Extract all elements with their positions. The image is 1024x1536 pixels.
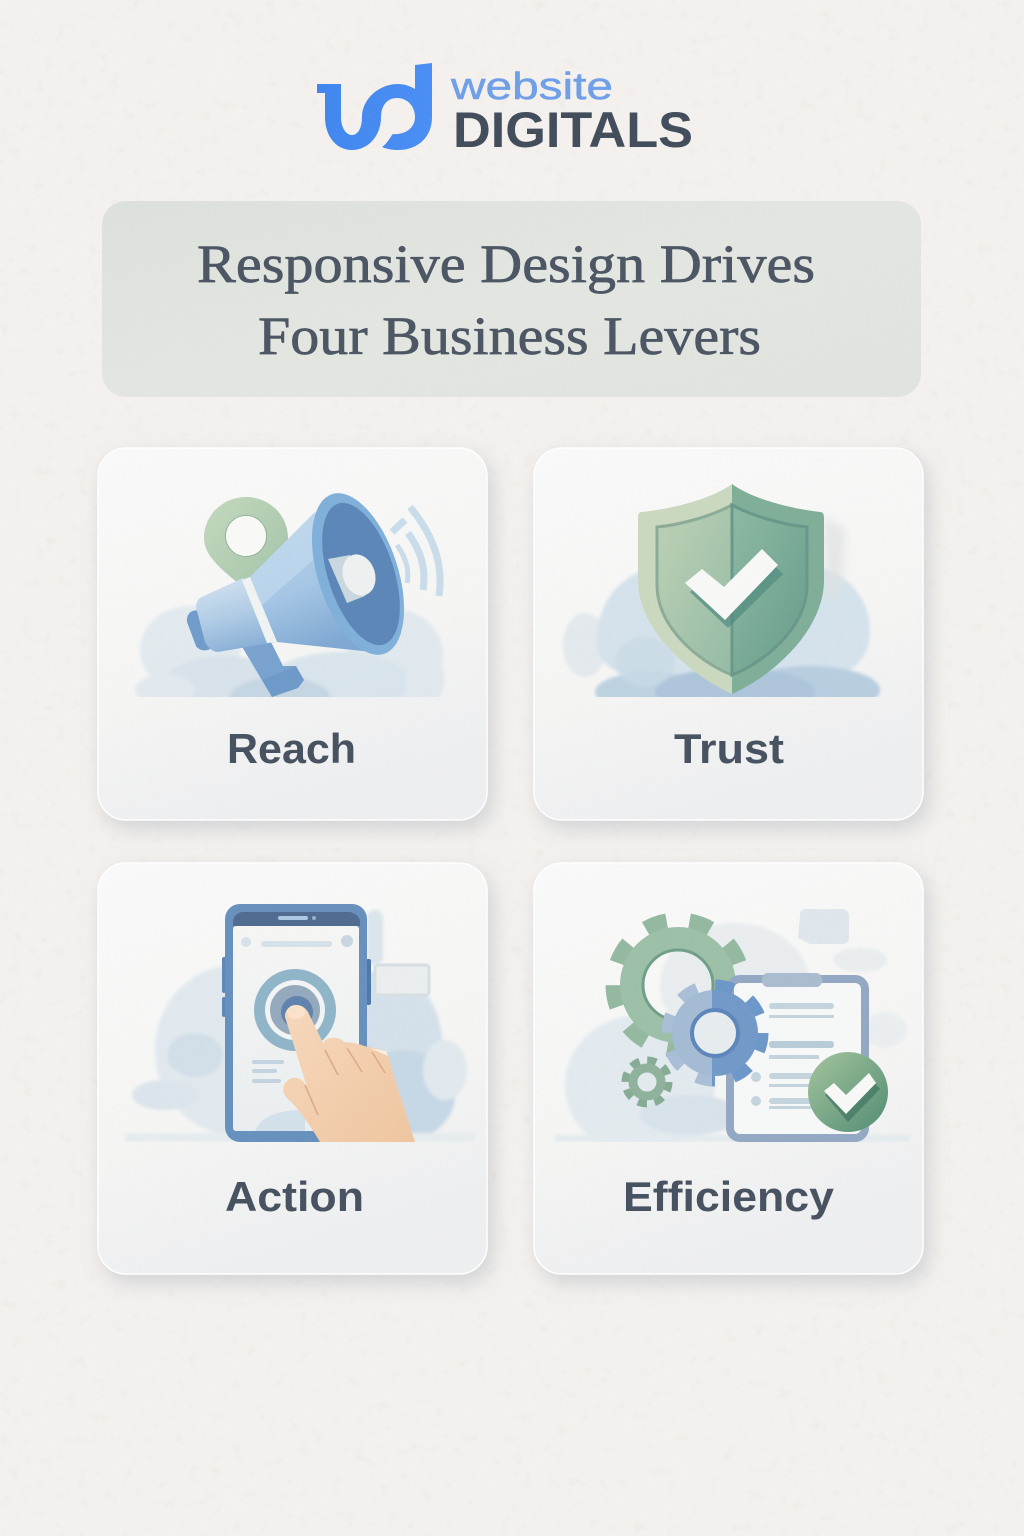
label: trust: Trust <box>674 725 784 772</box>
panel: trust <box>534 448 923 820</box>
icon: large green gear <box>614 921 742 1049</box>
icon: small green gear <box>626 1061 668 1103</box>
panel: action <box>98 863 487 1274</box>
logo word: website: website <box>450 66 613 108</box>
panel: reach <box>98 448 487 820</box>
clouds: reach <box>134 606 445 697</box>
icon: chat bubble <box>798 909 849 944</box>
label: efficiency: Efficiency <box>623 1173 835 1220</box>
icon: check badge <box>808 1052 888 1132</box>
clipboard lines <box>751 1003 834 1109</box>
icon: blue gear <box>669 987 761 1079</box>
title panel <box>102 201 921 397</box>
icon: megaphone <box>187 482 422 697</box>
clouds: trust <box>563 569 882 697</box>
icon: clipboard <box>730 973 865 1138</box>
icon: phone <box>222 904 371 1142</box>
title line 2: Four Business Levers <box>258 306 761 366</box>
icon: small card <box>375 965 429 995</box>
icon: sound waves <box>392 507 440 596</box>
icon: hand <box>283 1005 415 1142</box>
clouds: action <box>125 910 475 1142</box>
panel: efficiency <box>534 863 923 1274</box>
icon: ud monogram <box>317 63 432 150</box>
tap target <box>254 969 336 1051</box>
logo word: digitals: DIGITALS <box>453 102 693 158</box>
pin hole <box>226 516 266 556</box>
icon: location pin <box>204 497 288 600</box>
icon: shield <box>638 484 845 694</box>
screen header <box>241 935 353 947</box>
title line 1: Responsive Design Drives <box>197 234 815 294</box>
logo: website digitals <box>317 63 693 158</box>
screen text lines <box>252 1060 284 1083</box>
clouds: efficiency <box>555 923 910 1155</box>
label: reach: Reach <box>227 725 356 772</box>
label: action: Action <box>225 1173 364 1220</box>
